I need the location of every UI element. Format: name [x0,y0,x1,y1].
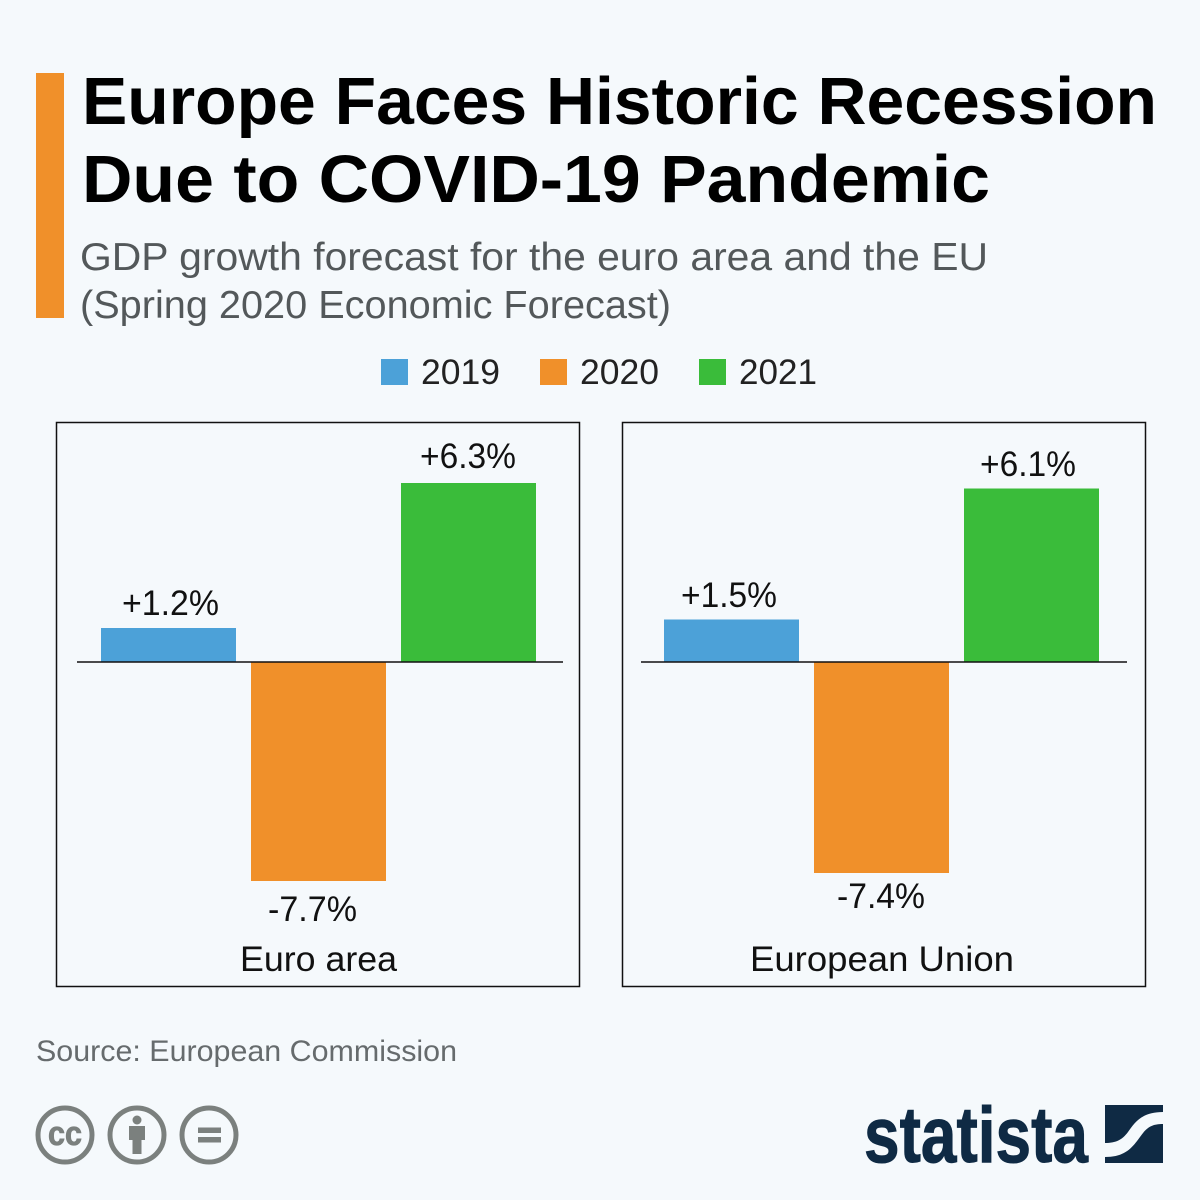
value labels: -7.4% [837,877,925,916]
panel label: Euro area [240,940,398,979]
panel: European Union [622,422,1146,986]
bar: 2019 EU [664,620,799,662]
bar: 2020 Euro area [251,662,386,881]
value labels: +6.1% [980,445,1076,484]
title: Due to COVID-19 Pandemic [82,142,990,217]
icon: creative commons [38,1108,92,1162]
icon: creative commons: cc [48,1115,82,1153]
icon: attribution [110,1108,164,1162]
bar: 2021 Euro area [401,483,536,662]
axis line [641,661,1127,663]
value labels [122,437,516,929]
value labels: +1.5% [681,576,777,615]
title: Europe Faces Historic Recession [82,64,1157,139]
title [82,64,1157,217]
value labels [681,445,1076,916]
bar: 2021 EU [964,488,1099,662]
subtitle: GDP growth forecast for the euro area and the EU [80,236,988,279]
logo: statista mark [1105,1105,1163,1163]
legend: 2019 [421,353,500,392]
legend [381,353,817,392]
legend: 2021 [739,353,817,392]
accent bar [36,73,64,318]
icon: no derivatives [182,1108,236,1162]
axis line [77,661,563,663]
panel: Euro area [56,422,580,986]
subtitle: (Spring 2020 Economic Forecast) [80,284,671,327]
value labels: +6.3% [420,437,516,476]
source: Source: European Commission [36,1035,457,1068]
subtitle [80,236,988,327]
value labels: -7.7% [268,890,357,929]
bar: 2019 Euro area [101,628,236,662]
legend: 2020 [580,353,659,392]
logo: statista wordmark: statista [864,1090,1089,1179]
bar: 2020 EU [814,662,949,873]
value labels: +1.2% [122,584,219,623]
panel label: European Union [750,940,1014,979]
